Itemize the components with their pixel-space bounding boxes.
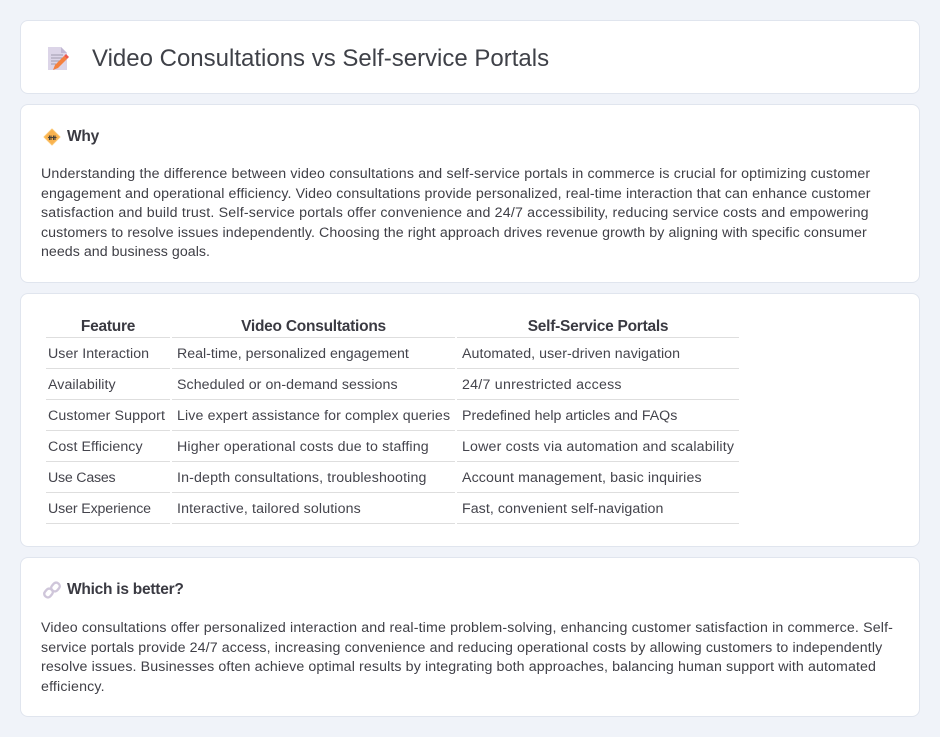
row: user experience: User Experience [48, 501, 151, 517]
header: feature: Feature [81, 318, 135, 335]
panel: why [20, 104, 920, 283]
text block: which is better: resolve issues. Businesses often achieve optimal results by integrating both approaches, balancing human support with automated [41, 659, 876, 675]
text block: which is better: service portals provide 24/7 access, increasing convenience and reducing operational costs by allowing customers to independently [41, 640, 882, 656]
icon: memo with pencil [48, 47, 69, 70]
text block: which is better: efficiency. [41, 679, 105, 695]
comparison table [46, 318, 739, 524]
comparison table: Lower costs via automation and scalability [462, 439, 734, 455]
text block: which is better: Video consultations offer personalized interaction and real-time problem-solving, enhancing customer satisfaction in commerce. Self- [41, 620, 893, 636]
icon: link [43, 581, 61, 599]
title: Video Consultations vs Self-service Portals [92, 45, 549, 72]
header: video consultations: Video Consultations [241, 318, 386, 335]
text block: which is better [41, 620, 893, 695]
icon: children crossing sign [44, 128, 60, 146]
comparison table: Scheduled or on-demand sessions [177, 377, 398, 393]
comparison table: Higher operational costs due to staffing [177, 439, 429, 455]
comparison table: Automated, user-driven navigation [462, 346, 680, 362]
row: availability: Availability [48, 377, 116, 393]
row: cost efficiency: Cost Efficiency [48, 439, 143, 455]
row: use cases: Use Cases [48, 470, 115, 486]
comparison table: Live expert assistance for complex queries [177, 408, 450, 424]
text block: why: Understanding the difference between video consultations and self-service portals in commerce is crucial for optimizing customer [41, 166, 870, 182]
panel: comparison table [20, 293, 920, 547]
comparison table: Interactive, tailored solutions [177, 501, 361, 517]
panel: which is better [20, 557, 920, 717]
heading: why: Why [67, 128, 99, 145]
row: user interaction: User Interaction [48, 346, 149, 362]
comparison table: Real-time, personalized engagement [177, 346, 409, 362]
panel: title header [20, 20, 920, 94]
header: self-service portals: Self-Service Portals [528, 318, 668, 335]
heading: which is better: Which is better? [67, 581, 184, 598]
comparison table: Account management, basic inquiries [462, 470, 702, 486]
comparison table: In-depth consultations, troubleshooting [177, 470, 427, 486]
comparison table: Predefined help articles and FAQs [462, 408, 677, 424]
comparison table: 24/7 unrestricted access [462, 377, 622, 393]
text block: why: customers to resolve issues independently. Choosing the right approach drives revenue growth by aligning with specific consumer [41, 225, 867, 241]
row: customer support: Customer Support [48, 408, 165, 424]
text block: why: engagement and operational efficiency. Video consultations provide personalized, real-time interaction that can enhance customer [41, 186, 871, 202]
text block: why: satisfaction and build trust. Self-service portals offer convenience and 24/7 accessibility, reducing service costs and empowering [41, 205, 869, 221]
comparison table: Fast, convenient self-navigation [462, 501, 663, 517]
text block: why [41, 166, 871, 260]
text block: why: needs and business goals. [41, 244, 210, 260]
